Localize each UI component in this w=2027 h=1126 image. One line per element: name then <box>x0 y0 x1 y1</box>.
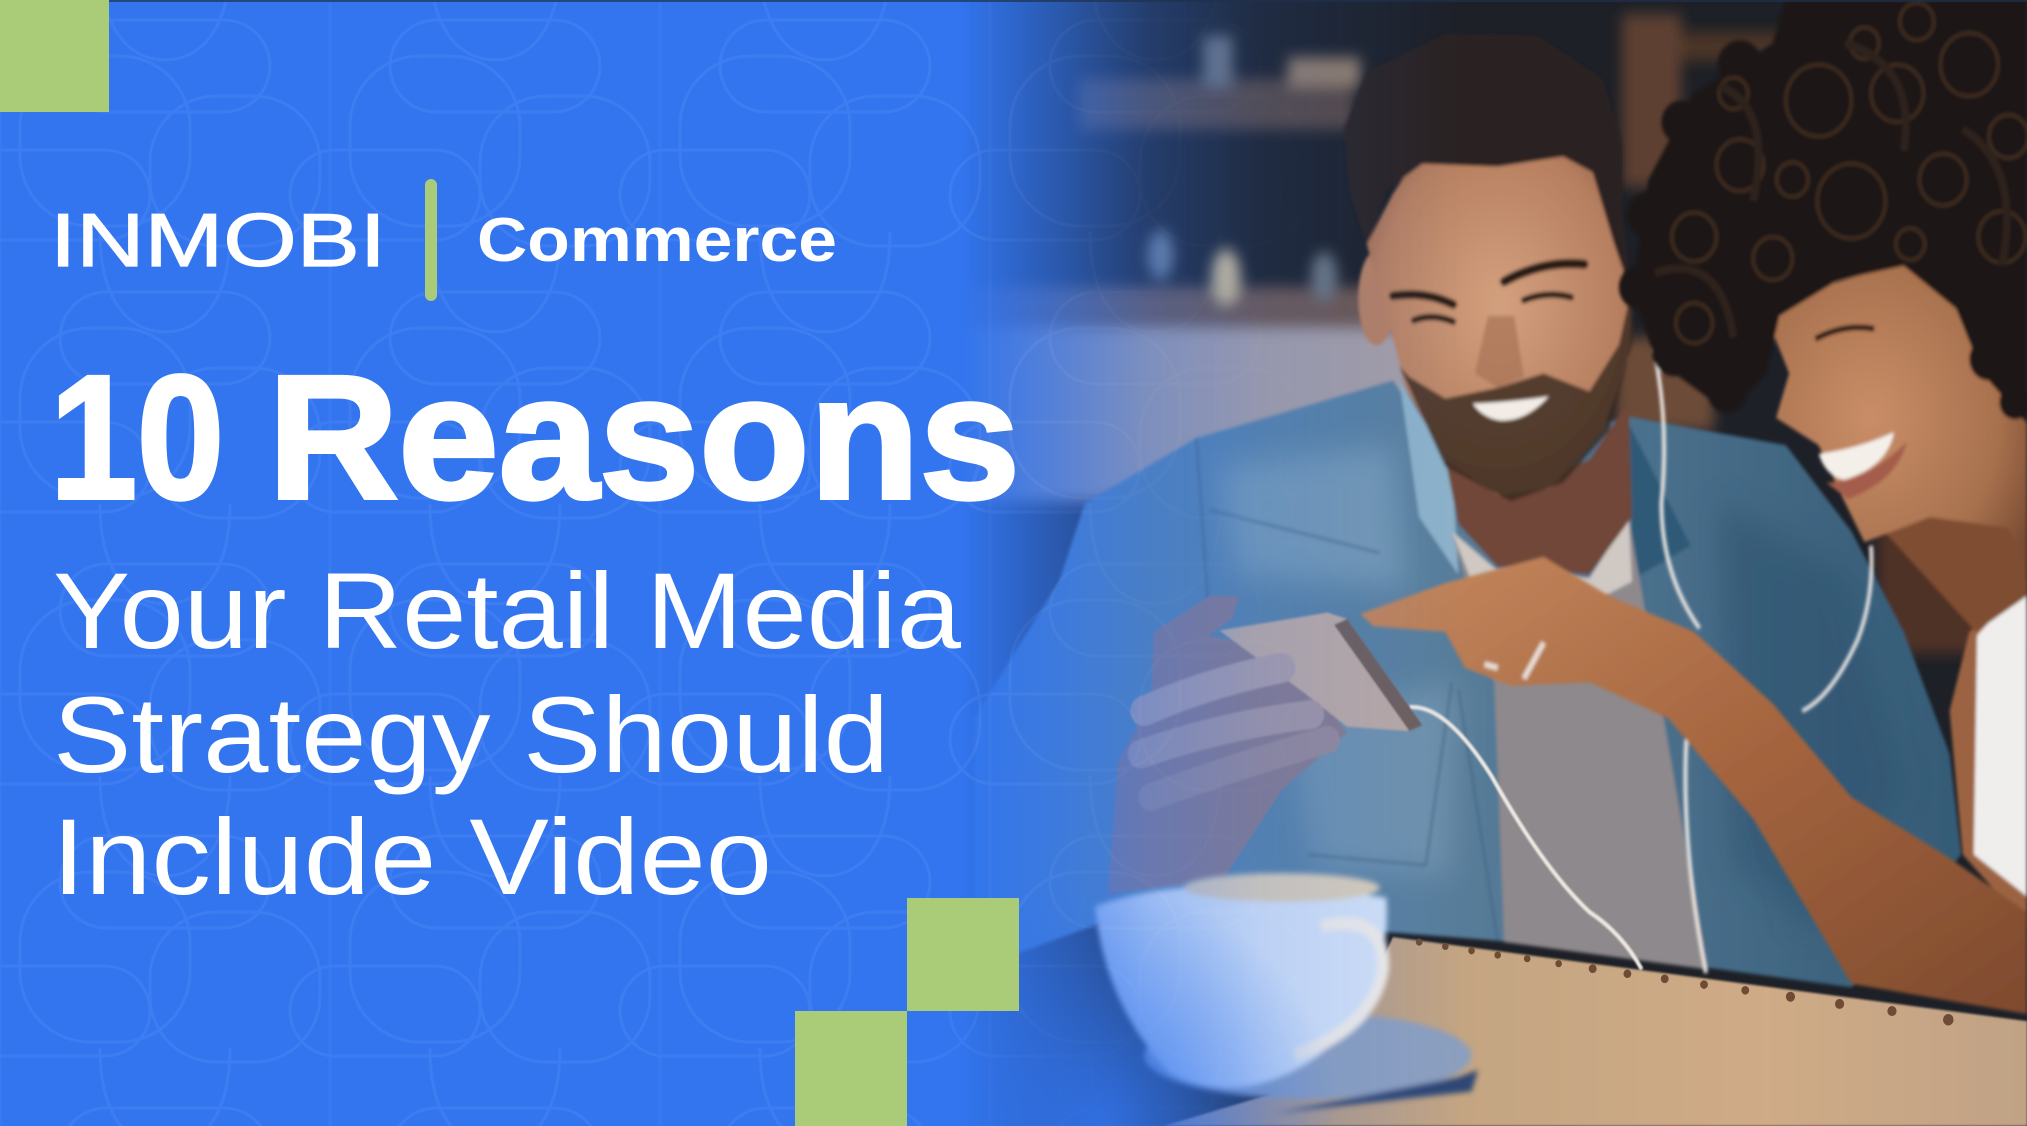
earphone cable right <box>1802 546 1872 711</box>
curls around the edge <box>1619 0 2027 419</box>
jacket shading <box>1216 445 1904 934</box>
man <box>974 34 1961 987</box>
smartphone <box>1219 613 1422 731</box>
earphone cable left <box>1645 316 1706 973</box>
blue fade over bottom of photo <box>860 886 1340 1126</box>
brows and eyes <box>1393 264 1584 322</box>
subheading: Include Video <box>52 796 772 917</box>
woman's arm and pointing hand <box>1360 557 2027 1014</box>
neck <box>1445 402 1632 574</box>
subheading: Your Retail Media <box>53 550 962 671</box>
green divider <box>425 179 437 301</box>
woman's shoulder and top <box>1360 0 2027 1014</box>
cafe background with shelves <box>902 0 2027 1126</box>
subheading <box>52 550 962 917</box>
nose <box>1475 316 1524 388</box>
woman's face <box>1772 262 2027 544</box>
coffee cup and saucer <box>1095 873 1478 1113</box>
woman's smile <box>1819 432 1894 480</box>
Commerce label: Commerce <box>477 206 837 275</box>
beard <box>1399 287 1634 501</box>
green square top left <box>0 0 109 112</box>
top edge strip <box>0 0 2027 2</box>
hand <box>1108 596 1347 894</box>
subheading: Strategy Should <box>53 674 889 795</box>
woman's eye <box>1815 327 1874 339</box>
cable to phone <box>1409 707 1642 969</box>
smile <box>1473 396 1549 421</box>
hair <box>1344 34 1632 294</box>
fingers over phone <box>1141 668 1327 797</box>
table with dotted edge <box>1164 707 2027 1126</box>
denim jacket <box>974 381 1961 987</box>
face <box>1367 147 1632 495</box>
headline: Reasons <box>268 340 1020 536</box>
woman's curly hair <box>1619 0 2027 424</box>
woman's neck <box>1886 515 2027 632</box>
jacket collar and pocket details <box>1196 440 1498 938</box>
logo lockup <box>50 179 837 301</box>
ear <box>1358 251 1395 345</box>
photo: couple smiling at a phone in a cafe <box>902 0 2027 1126</box>
headline: 10 <box>50 340 224 536</box>
man's hand and phone <box>1108 596 1422 894</box>
InMobi wordmark: INMOBI <box>50 198 386 282</box>
grey t-shirt <box>1452 517 1707 969</box>
green squares bottom <box>795 898 1019 1126</box>
